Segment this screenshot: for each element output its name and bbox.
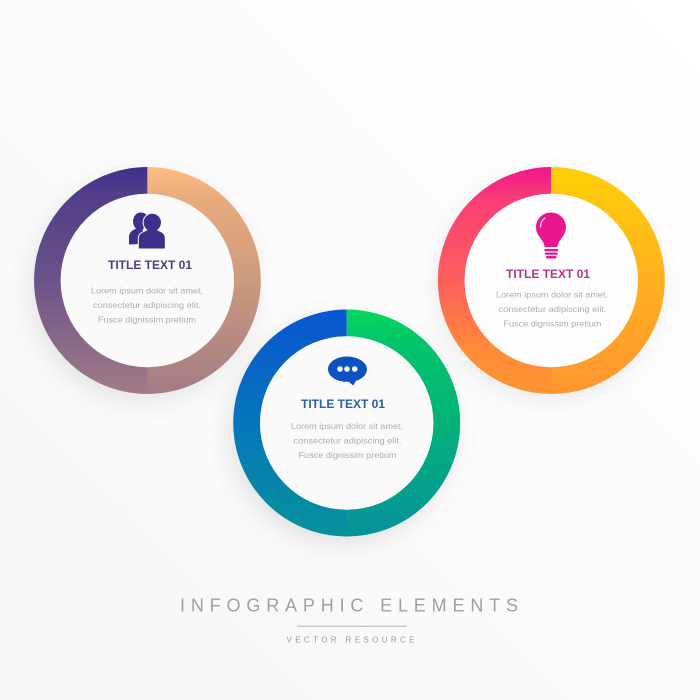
footer subheading: VECTOR RESOURCE bbox=[286, 636, 414, 644]
body text: Fusce dignissim pretium bbox=[504, 318, 602, 328]
body text bbox=[291, 421, 403, 460]
body text bbox=[496, 290, 608, 328]
ring right half yellow bbox=[551, 167, 665, 394]
body text: consectetur adipiscing elit. bbox=[498, 304, 606, 314]
title: TITLE TEXT 01 bbox=[108, 258, 192, 272]
body text: Lorem ipsum dolor sit amet, bbox=[496, 290, 608, 300]
inner white disc bbox=[465, 194, 638, 367]
icon: light bulb bbox=[536, 212, 566, 258]
footer heading: INFOGRAPHIC ELEMENTS bbox=[180, 596, 518, 616]
title: TITLE TEXT 01 bbox=[506, 267, 590, 281]
panel: pink and yellow ring bbox=[436, 167, 665, 400]
ring bottom join bbox=[346, 510, 347, 536]
body text: Lorem ipsum dolor sit amet, bbox=[291, 421, 403, 431]
body text bbox=[91, 286, 203, 324]
panel: purple and peach ring bbox=[31, 167, 261, 400]
ring bottom join bbox=[551, 367, 552, 394]
icon: people bbox=[129, 212, 165, 249]
inner white disc bbox=[260, 336, 433, 510]
inner white disc bbox=[61, 194, 234, 367]
body text: Fusce dignissim pretium bbox=[298, 450, 396, 460]
body text: Lorem ipsum dolor sit amet, bbox=[91, 286, 203, 296]
ring right half peach bbox=[147, 167, 261, 394]
body text: consectetur adipiscing elit. bbox=[294, 436, 402, 446]
ring left half pink bbox=[438, 167, 551, 394]
panel: blue and green ring bbox=[230, 310, 460, 543]
ring left half blue bbox=[233, 310, 347, 536]
ring right half green bbox=[347, 310, 460, 536]
icon: speech bubble bbox=[328, 356, 367, 386]
body text: consectetur adipiscing elit. bbox=[93, 300, 201, 310]
ring left half purple bbox=[34, 167, 148, 394]
body text: Fusce dignissim pretium bbox=[98, 314, 196, 324]
title: TITLE TEXT 01 bbox=[301, 397, 385, 411]
ring bottom join bbox=[147, 367, 148, 394]
